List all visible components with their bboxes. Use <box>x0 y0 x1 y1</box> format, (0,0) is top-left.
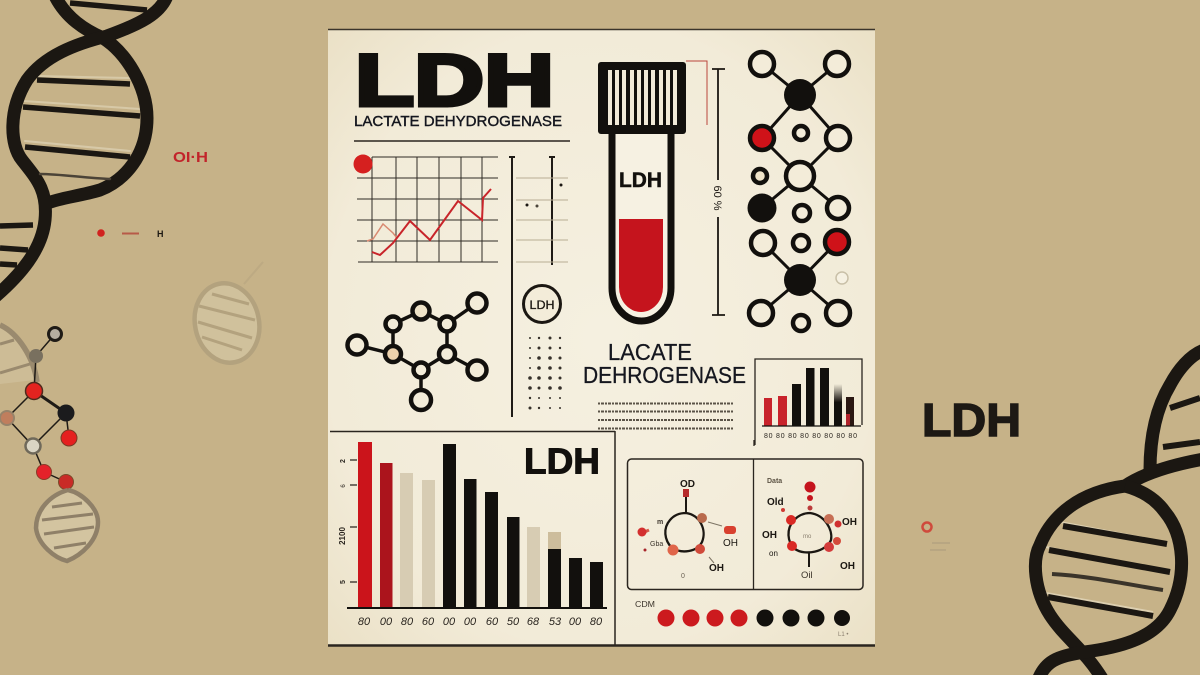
subheading: lactate dehydrogenase: LACTATE DEHYDROGENASE <box>354 113 562 130</box>
ring structure 2: OH <box>762 530 777 541</box>
hexagonal molecule <box>348 294 486 410</box>
x axis labels: 00 <box>569 616 582 628</box>
LDH badge: LDH <box>530 298 554 312</box>
x axis labels: 00 <box>464 616 477 628</box>
DNA helix: lower right <box>1035 350 1200 675</box>
line chart <box>354 154 498 262</box>
vertical axes and dot plot <box>509 157 568 417</box>
ring structure 2: Oil <box>801 570 813 581</box>
small red ring <box>922 522 950 550</box>
test tube <box>598 62 686 321</box>
LDH badge <box>524 286 560 322</box>
tube label: LDH <box>619 169 662 192</box>
caption: dehydrogenase: DEHROGENASE <box>583 362 746 388</box>
large bar chart: 2100 <box>338 527 347 545</box>
branching molecule <box>748 52 850 331</box>
ring structure 1: m <box>657 519 663 526</box>
ring structure 1: OD <box>680 479 695 490</box>
molecule: left side <box>0 328 77 490</box>
ring structure 1 <box>638 479 738 580</box>
faded DNA: lower left <box>36 490 98 561</box>
measurement bracket <box>686 61 725 315</box>
DNA helix: top left <box>0 0 167 296</box>
x axis labels: 60 <box>422 616 435 628</box>
heading: LDH: LDH <box>355 40 554 122</box>
ring structure 1: 0 <box>681 573 685 580</box>
dot legend <box>635 600 850 638</box>
section divider lines <box>330 431 615 645</box>
ring structure 1: OH <box>723 538 738 549</box>
small bar chart <box>755 359 862 445</box>
x axis labels: 80 <box>358 616 371 628</box>
small bar chart: 80 80 80 80 80 80 80 80 <box>764 433 857 440</box>
ring structure 2 <box>762 478 857 581</box>
small red marker with H: H <box>157 229 164 239</box>
large bar chart: 5 <box>340 580 347 584</box>
ring structure 2: OH <box>840 561 855 572</box>
ring structure 2: OH <box>842 517 857 528</box>
dot legend: CDM <box>635 600 655 609</box>
ring structure 2: mo <box>803 534 812 540</box>
x axis labels: 00 <box>380 616 393 628</box>
poster panel <box>328 29 875 646</box>
structure boxes <box>628 440 863 590</box>
ring structure 1: OH <box>709 563 724 574</box>
x axis labels: 68 <box>527 616 540 628</box>
dot matrix <box>528 336 562 410</box>
ring structure 2: Old <box>767 497 784 508</box>
ring structure 1: Gba <box>650 541 663 548</box>
faded DNA: upper middle left <box>187 262 267 369</box>
x axis labels: 80 <box>401 616 414 628</box>
large bar chart: 2 <box>340 459 347 463</box>
side label: red OH: OI·H <box>173 149 208 166</box>
chart title: LDH <box>524 440 600 482</box>
x axis labels: 53 <box>549 616 562 628</box>
fine print lines <box>598 404 733 428</box>
faded DNA: behind left molecule <box>0 325 37 384</box>
large bar chart <box>338 440 607 628</box>
x axis labels: 80 <box>590 616 603 628</box>
x axis labels <box>358 616 603 628</box>
x axis labels: 00 <box>443 616 456 628</box>
small red marker with H <box>97 229 164 239</box>
measurement bracket: 60 % <box>711 185 723 211</box>
caption: lactate: LACATE <box>608 339 692 365</box>
ring structure 2: Data <box>767 478 782 485</box>
x axis labels: 60 <box>486 616 499 628</box>
ring structure 2: on <box>769 549 778 558</box>
right label: LDH: LDH <box>922 394 1021 446</box>
large bar chart: 6 <box>341 484 347 488</box>
dot legend: L1 • <box>838 632 848 638</box>
x axis labels: 50 <box>507 616 520 628</box>
